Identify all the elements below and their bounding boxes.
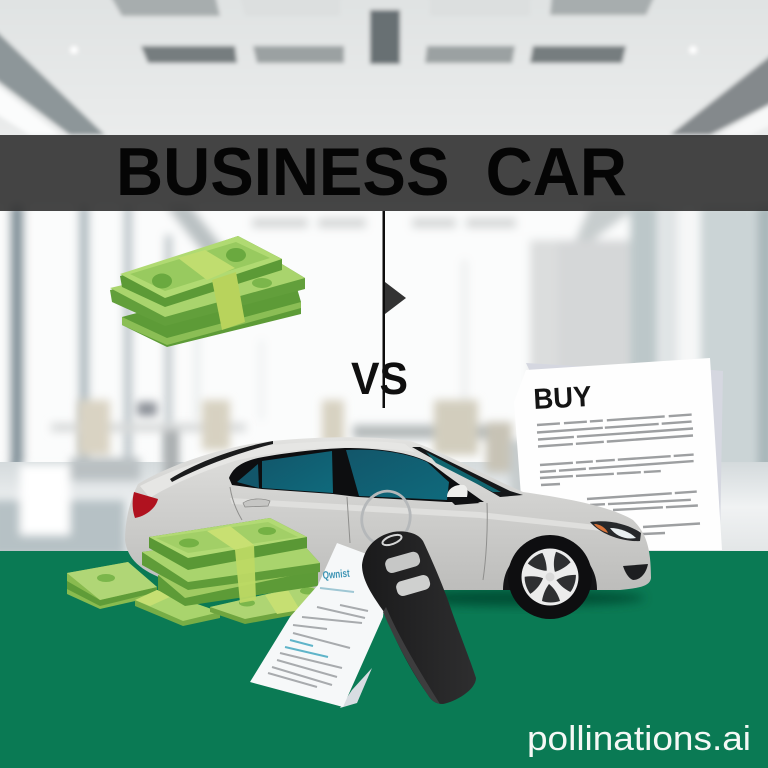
main stack [142,518,320,606]
floor [0,551,768,768]
ceiling [0,0,768,215]
fob body [362,531,476,704]
money stack bottom [67,518,343,626]
car body [125,437,651,590]
car windows [229,447,523,502]
car mirror [447,485,480,505]
car rear window strip [170,441,273,482]
receipt lines [268,588,368,687]
car head light [590,521,641,541]
car [125,437,651,619]
furniture [0,400,550,556]
car fog light [623,564,648,580]
watermark: pollinations.ai [527,720,751,758]
receipt document [250,543,388,708]
document: buy [514,358,723,550]
document heading: BUY [533,381,592,416]
left bills [67,562,157,609]
icon: money stack top [110,236,305,347]
windows and walls [0,205,768,535]
vs label: VS [351,353,408,404]
receipt teal lines [285,640,328,657]
floor reflection [0,462,768,552]
title text: BUSINESS CAR [116,134,627,210]
car wheel [503,535,597,619]
title band [0,134,768,211]
icon: car key fob [356,486,476,704]
car door handle [243,499,270,507]
document text lines [537,414,700,534]
car tail light [133,492,158,518]
car highlights [140,441,415,498]
right bills [210,585,343,624]
fob button bottom [395,574,432,597]
money straps [235,545,256,603]
middle bills [135,590,220,626]
receipt label: Qwnist [322,568,350,582]
fob button top [384,550,422,574]
key ring [356,486,416,550]
fob logo [381,533,403,547]
car shadow [395,590,645,606]
divider arrow [382,211,406,408]
fob lower shading [383,607,440,704]
car door seams [230,487,487,580]
